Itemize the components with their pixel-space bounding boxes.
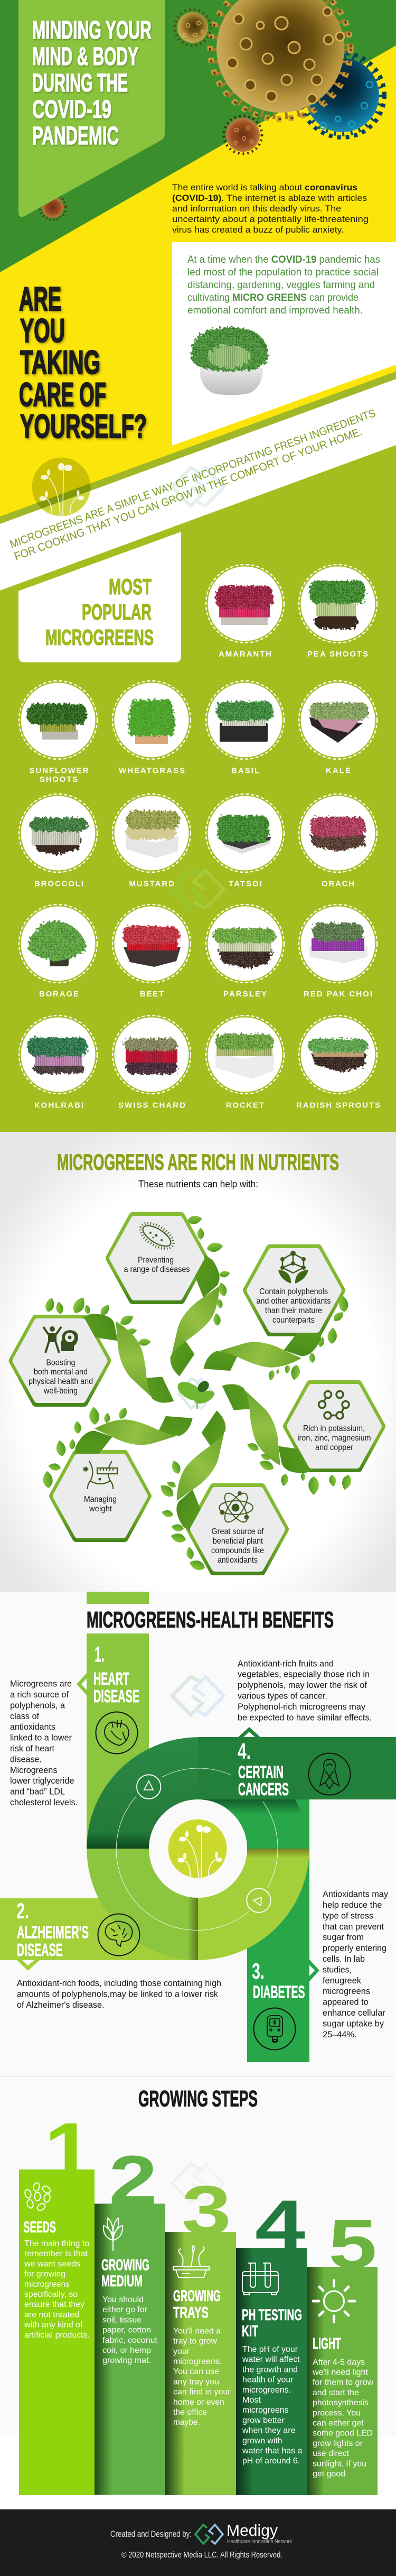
panel: benefits and steps background xyxy=(0,1592,396,2436)
benefit 2: alzheimer's disease xyxy=(16,1898,139,1960)
step 4: ph testing kit: when they are xyxy=(242,2426,296,2435)
card: orach: ORACH xyxy=(322,880,354,888)
heading: most popular microgreens xyxy=(45,574,154,650)
card: sunflower shoots: SUNFLOWER xyxy=(30,767,89,775)
big numerals: 2 xyxy=(109,2141,157,2219)
step 1: seeds: ensure that they xyxy=(24,2300,84,2309)
heading: are you taking care of yourself: ARE xyxy=(19,281,61,318)
step 3: growing trays xyxy=(165,2232,236,2495)
illustration: microgreens in bowl xyxy=(191,327,268,395)
card: rocket xyxy=(206,1015,284,1110)
step 5: light: for them to grow xyxy=(313,2378,373,2387)
text block: benefit 1 copy: risk of heart xyxy=(10,1744,54,1753)
icon: blue coronavirus xyxy=(300,53,384,137)
icon: brain xyxy=(98,1914,139,1956)
benefit 1: heart disease: 1. xyxy=(95,1642,105,1666)
step 2: growing medium xyxy=(95,2204,165,2495)
text block: callout copy: distancing, gardening, veggies farming and xyxy=(187,280,375,291)
card: parsley xyxy=(206,904,284,999)
icon: atom xyxy=(219,1490,253,1526)
step 2: growing medium: growing mat. xyxy=(102,2356,151,2365)
heading: growing steps: GROWING STEPS xyxy=(138,2086,258,2111)
card: minerals: iron, zinc, magnesium xyxy=(298,1434,371,1443)
card: mental and physical health: well-being xyxy=(43,1387,78,1396)
text block: benefit 3 copy: help reduce the xyxy=(323,1900,382,1910)
icon: Medigy logo xyxy=(195,2525,223,2544)
card: tatsoi xyxy=(206,794,284,888)
step 5: light: some good LED xyxy=(313,2429,373,2438)
card: mental and physical health: Boosting xyxy=(46,1359,75,1367)
step 3: growing trays: any tray you xyxy=(173,2377,219,2386)
benefit 1: heart disease xyxy=(93,1642,139,1754)
step 4: ph testing kit: microgreens xyxy=(242,2406,289,2415)
text block: benefit 3 copy: sugar from xyxy=(323,1933,364,1942)
benefit 2: alzheimer's disease: DISEASE xyxy=(17,1940,63,1960)
panel: popular microgreens background xyxy=(0,445,396,1132)
arrow: benefit 3 xyxy=(309,1960,319,1981)
step 5: light: process. You xyxy=(313,2408,361,2417)
icon: seeds xyxy=(24,2182,52,2212)
heading: are you taking care of yourself xyxy=(19,281,147,445)
footer xyxy=(0,2509,396,2576)
heading: are you taking care of yourself: YOURSELF? xyxy=(20,408,147,445)
card: polyphenols: counterparts xyxy=(272,1316,315,1325)
step 1: seeds: we want seeds xyxy=(24,2259,80,2268)
icon: red coronavirus xyxy=(224,116,262,154)
card: parsley: PARSLEY xyxy=(223,990,267,999)
card: wheatgrass xyxy=(112,681,191,775)
diagram: twisted ribbons xyxy=(64,1255,332,1532)
step 3: growing trays: TRAYS xyxy=(173,2304,209,2322)
footer: Created and Designed by: xyxy=(110,2529,192,2539)
text block: benefit 1 copy: polyphenols, a xyxy=(10,1701,65,1710)
text block: benefit 4 copy: Antioxidant-rich fruits and xyxy=(238,1659,334,1668)
card: kale xyxy=(299,681,377,775)
watermark logo xyxy=(246,194,285,223)
heading: most popular microgreens: MICROGREENS xyxy=(45,625,154,650)
panel: white callout xyxy=(172,242,396,446)
text block: benefit 3 copy: properly entering xyxy=(323,1944,386,1953)
icon: awareness ribbon xyxy=(308,1753,351,1795)
icon: large gold coronavirus xyxy=(210,0,351,119)
card: radish sprouts: RADISH SPROUTS xyxy=(296,1101,380,1110)
text block: intro: (COVID-19). The internet is ablaze with articles xyxy=(172,193,367,203)
card: plant compounds xyxy=(194,1490,281,1568)
step 3: growing trays: tray to grow xyxy=(173,2337,217,2346)
benefit 3: diabetes xyxy=(252,1959,305,2050)
text block: intro: The entire world is talking about coronavirus xyxy=(172,182,357,192)
card: plant compounds: beneficial plant xyxy=(213,1537,263,1546)
card: red pak choi xyxy=(299,904,377,999)
text block: benefit 3 copy: microgreens xyxy=(323,1987,370,1996)
text block: benefit 3 copy: appeared to xyxy=(323,1998,369,2007)
step 2: growing medium: soil, tissue xyxy=(102,2315,142,2324)
card: broccoli: BROCCOLI xyxy=(34,880,83,888)
title xyxy=(32,16,152,150)
benefit 3: diabetes: 3. xyxy=(252,1959,265,1983)
card: basil: BASIL xyxy=(231,767,259,775)
text block: benefit 1 copy xyxy=(10,1679,78,1807)
step 1: seeds: SEEDS xyxy=(23,2219,56,2236)
icon: small red virus under title panel xyxy=(40,195,65,220)
watermark logo xyxy=(172,1677,224,1715)
text block: callout copy: led most of the population to practice social xyxy=(187,267,379,278)
step 1: seeds: with any kind of xyxy=(24,2321,83,2330)
icon: centre sprout xyxy=(168,1820,227,1878)
card: preventing diseases: a range of diseases xyxy=(124,1265,190,1274)
panel: hero background xyxy=(0,0,396,534)
card: pea shoots xyxy=(299,565,377,659)
text block: benefit 4 copy: be expected to have similar effects. xyxy=(238,1713,372,1722)
card: red pak choi: RED PAK CHOI xyxy=(304,990,372,999)
text block: benefit 4 copy: vegetables, especially those rich in xyxy=(238,1670,370,1679)
step 4: ph testing kit: health of your xyxy=(242,2376,294,2385)
footer: Medigy xyxy=(227,2521,278,2540)
step 5: light: and start the xyxy=(313,2388,359,2397)
title: COVID-19 xyxy=(32,96,111,124)
step 2: growing medium: either go for xyxy=(102,2305,148,2314)
card: tatsoi: TATSOI xyxy=(229,880,262,888)
card: mustard xyxy=(112,794,191,888)
title: PANDEMIC xyxy=(32,122,119,150)
card: polyphenols: and other antioxidants xyxy=(257,1297,331,1306)
step 3: growing trays: can find in your xyxy=(173,2388,231,2397)
icon: glucose meter xyxy=(253,2008,296,2050)
icon: tray with sprouts xyxy=(173,2246,209,2277)
text block: benefit 2 copy: of Alzheimer's disease. xyxy=(17,2000,105,2010)
text block: benefit 4 copy: various types of cancer. xyxy=(238,1692,327,1701)
step 4: ph testing kit: water that has a xyxy=(242,2446,303,2455)
step 2: growing medium: You should xyxy=(102,2295,144,2304)
text block: benefit 2 copy: Antioxidant-rich foods, including those containing high xyxy=(17,1979,221,1988)
text block: benefit 1 copy: disease. xyxy=(10,1755,42,1764)
card: mental and physical health xyxy=(16,1322,103,1399)
icon: bacterium xyxy=(136,1218,177,1254)
card: swiss chard xyxy=(112,1015,191,1110)
icon: person and head xyxy=(43,1326,78,1353)
step 5: light: use direct xyxy=(313,2449,350,2458)
text block: benefit 1 copy: a rich source of xyxy=(10,1690,69,1700)
step 1: seeds: microgreens xyxy=(24,2280,70,2289)
step 2: growing medium: paper, cotton xyxy=(102,2326,151,2335)
card: polyphenols: than their mature xyxy=(265,1306,322,1315)
step 1: seeds: are not treated xyxy=(24,2310,79,2319)
card: managing weight xyxy=(56,1457,144,1535)
step 4: ph testing kit: grow better xyxy=(242,2416,285,2425)
icon: waist with tape xyxy=(83,1461,117,1489)
step 2: growing medium: GROWING xyxy=(101,2256,149,2274)
big numerals: 5 xyxy=(328,2205,377,2283)
icon: sprout badge xyxy=(32,458,91,516)
text block: benefit 3 copy: fenugreek xyxy=(323,1976,362,1986)
step 3: growing trays: your xyxy=(173,2347,190,2356)
arrow: benefit 2 xyxy=(17,1960,40,1971)
accent bar xyxy=(87,1592,149,1604)
step 5: light: After 4-5 days xyxy=(313,2358,365,2367)
text block: benefit 3 copy: Antioxidants may xyxy=(323,1890,389,1899)
step 5: light: get good xyxy=(313,2470,345,2478)
step 2: growing medium: fabric, coconut xyxy=(102,2336,158,2345)
text block: nutrients subheading: These nutrients can help with: xyxy=(138,1179,258,1189)
step 4: ph testing kit: KIT xyxy=(242,2323,258,2340)
panel: lower white background xyxy=(0,2436,396,2509)
icon: sun xyxy=(313,2280,355,2322)
big numerals: 4 xyxy=(255,2185,305,2263)
card: borage xyxy=(19,904,97,999)
step 3: growing trays: the office xyxy=(173,2408,207,2417)
card: sunflower shoots: SHOOTS xyxy=(40,775,78,784)
step 1: seeds: The main thing to xyxy=(24,2239,89,2248)
benefit 2 band xyxy=(0,1898,198,1960)
card: plant compounds: antioxidants xyxy=(218,1556,258,1565)
card: orach xyxy=(299,794,377,888)
title: MINDING YOUR xyxy=(32,16,152,44)
watermark logo xyxy=(172,468,224,506)
benefit 4 band xyxy=(198,1737,396,1799)
step 4: ph testing kit: pH of around 6. xyxy=(242,2457,300,2466)
card: kale: KALE xyxy=(326,767,351,775)
card: beet: BEET xyxy=(140,990,164,999)
step 4: ph testing kit: the growth and xyxy=(242,2365,298,2374)
step 1: seeds: specifically, so xyxy=(24,2290,78,2299)
watermark logo xyxy=(172,870,224,908)
benefit 3 bar xyxy=(247,1799,309,2062)
step 4: ph testing kit: PH TESTING xyxy=(242,2306,302,2324)
card: mustard: MUSTARD xyxy=(129,880,174,888)
big numerals: 3 xyxy=(182,2171,231,2249)
step 5: light: LIGHT xyxy=(313,2335,341,2352)
decorative yellow strip and olive strip xyxy=(0,372,396,524)
text block: benefit 1 copy: cholesterol levels. xyxy=(10,1798,78,1807)
card: minerals xyxy=(290,1388,378,1465)
step 3: growing trays: maybe. xyxy=(173,2418,200,2427)
card: radish sprouts xyxy=(296,1015,380,1110)
icon: ring node bottom xyxy=(247,1888,271,1913)
card: kohlrabi: KOHLRABI xyxy=(34,1101,83,1110)
step 2: growing medium: MEDIUM xyxy=(101,2273,143,2290)
step 1: seeds xyxy=(19,2169,95,2495)
step 4: ph testing kit xyxy=(236,2248,307,2495)
decoration: leaves around diagram xyxy=(42,1214,353,1572)
step 3: growing trays: microgreens. xyxy=(173,2357,222,2366)
panel: nutrients background xyxy=(0,1132,396,1592)
step 5: light: can either get xyxy=(313,2419,364,2427)
benefit 1: heart disease: HEART xyxy=(93,1669,129,1688)
card: minerals: and copper xyxy=(315,1443,354,1452)
text block: benefit 3 copy: type of stress xyxy=(323,1911,373,1921)
text block: intro: virus has created a buzz of public anxiety. xyxy=(172,225,344,235)
icon: test tubes xyxy=(242,2263,278,2295)
card: mental and physical health: both mental and xyxy=(34,1368,88,1377)
chart: ring quadrants xyxy=(87,1737,309,1960)
card: amaranth xyxy=(206,565,284,659)
text block: benefit 2 copy xyxy=(17,1979,221,2010)
card: amaranth: AMARANTH xyxy=(219,650,271,659)
text block: benefit 3 copy: 25–44%. xyxy=(323,2030,357,2039)
benefit 1 bar xyxy=(87,1633,149,1849)
icon: mineral rings xyxy=(319,1391,349,1419)
text block: benefit 1 copy: lower triglyceride xyxy=(10,1776,74,1786)
step 4: ph testing kit: water will affect xyxy=(242,2355,300,2364)
text block: benefit 3 copy: that can prevent xyxy=(323,1922,384,1932)
text block: intro: uncertainty about a potentially life-threatening xyxy=(172,214,369,224)
step 5: light: we'll need light xyxy=(312,2368,369,2377)
card: pea shoots: PEA SHOOTS xyxy=(307,650,368,659)
text block: benefit 3 copy: sugar uptake by xyxy=(323,2019,384,2028)
arrow: benefit 4 xyxy=(238,1727,260,1737)
card: beet xyxy=(112,904,191,999)
step 3: growing trays: You can use xyxy=(173,2367,219,2376)
step 5: light: grow lights or xyxy=(313,2439,363,2448)
card: plant compounds: Great source of xyxy=(211,1527,264,1536)
card: borage: BORAGE xyxy=(39,990,79,999)
text block: benefit 1 copy: antioxidants xyxy=(10,1722,55,1732)
step 4: ph testing kit: microgreens. xyxy=(242,2386,291,2395)
text block: benefit 4 copy: Polyphenol-rich microgreens may xyxy=(238,1702,366,1712)
panel: popular microgreens heading card xyxy=(18,532,181,662)
step 4: ph testing kit: Most xyxy=(242,2396,261,2405)
icon: heart xyxy=(96,1712,137,1754)
title: DURING THE xyxy=(32,69,128,97)
footer: Healthcare Innovation Network xyxy=(227,2538,292,2545)
text block: benefit 3 copy xyxy=(323,1890,389,2039)
text block: benefit 1 copy: linked to a lower xyxy=(10,1733,72,1743)
step 3: growing trays: home or even xyxy=(173,2398,224,2407)
text block: benefit 3 copy: enhance cellular xyxy=(323,2008,385,2018)
card: managing weight: weight xyxy=(89,1504,112,1513)
step 3: growing trays: You'll need a xyxy=(173,2326,221,2335)
step 4: ph testing kit: grown with xyxy=(242,2436,282,2445)
step 2: growing medium: coir, or hemp xyxy=(102,2346,151,2355)
card: sunflower shoots xyxy=(19,681,97,784)
benefit 4: certain cancers: 4. xyxy=(238,1739,251,1764)
benefit 2: alzheimer's disease: 2. xyxy=(16,1898,29,1923)
step 5: light: sunlight. If you xyxy=(313,2459,366,2468)
heading: most popular microgreens: POPULAR xyxy=(82,599,152,624)
text block: benefit 4 copy: polyphenols, may lower the risk of xyxy=(238,1681,367,1690)
heading: are you taking care of yourself: YOU xyxy=(20,312,65,349)
panel: diagonal white band xyxy=(0,379,396,590)
step 5: light: photosynthesis xyxy=(313,2398,369,2407)
arrow: benefit 1 xyxy=(77,1673,87,1695)
card: swiss chard: SWISS CHARD xyxy=(118,1101,185,1110)
card: mental and physical health: physical health and xyxy=(29,1377,93,1386)
step 3: growing trays: GROWING xyxy=(173,2287,221,2305)
icon: central leaf logo xyxy=(173,1371,222,1416)
text block: callout copy: At a time when the COVID-19 pandemic has xyxy=(187,254,380,265)
text block: callout copy: cultivating MICRO GREENS can provide xyxy=(187,292,359,303)
benefit 3: diabetes: DIABETES xyxy=(253,1982,305,2002)
heading: are you taking care of yourself: TAKING xyxy=(20,344,100,381)
benefit 4: certain cancers: CERTAIN xyxy=(238,1762,284,1781)
text block: benefit 1 copy: class of xyxy=(10,1712,39,1721)
big numerals xyxy=(44,2106,377,2283)
text block: benefit 1 copy: Microgreens xyxy=(10,1766,57,1775)
card: wheatgrass: WHEATGRASS xyxy=(119,767,185,775)
text block: benefit 2 copy: amounts of polyphenols,may be linked to a lower risk xyxy=(17,1990,219,1999)
text block: benefit 1 copy: and “bad” LDL xyxy=(10,1787,65,1797)
icon: ring node top xyxy=(137,1775,161,1799)
heading: most popular microgreens: MOST xyxy=(109,574,152,599)
text block: intro: and information on this deadly virus. The xyxy=(172,204,341,214)
benefit 1: heart disease: DISEASE xyxy=(93,1686,139,1706)
card: plant compounds: compounds like xyxy=(211,1546,264,1555)
card: polyphenols xyxy=(250,1251,338,1329)
card: broccoli xyxy=(19,794,97,888)
card: rocket: ROCKET xyxy=(226,1101,264,1110)
footer: © 2020 Netspective Media LLC. All Rights Reserved. xyxy=(121,2551,282,2560)
step 5: light xyxy=(307,2267,378,2495)
title: MIND & BODY xyxy=(32,43,138,71)
icon: wheat xyxy=(103,2218,122,2251)
divider xyxy=(0,2076,396,2077)
step 1: seeds: artificial products. xyxy=(24,2331,90,2340)
heading: are you taking care of yourself: CARE OF xyxy=(19,376,106,413)
diagram: hexagon rims xyxy=(13,1216,382,1572)
card: kohlrabi xyxy=(19,1015,97,1110)
card: basil xyxy=(206,681,284,775)
step 1: seeds: remember is that xyxy=(24,2249,88,2258)
card: preventing diseases: Preventing xyxy=(138,1256,174,1265)
card: polyphenols: Contain polyphenols xyxy=(259,1287,328,1296)
step 1: seeds: for growing xyxy=(24,2270,65,2279)
step 4: ph testing kit: The pH of your xyxy=(242,2345,298,2354)
benefit 4: certain cancers xyxy=(238,1739,351,1799)
panel: title card xyxy=(18,0,165,217)
card: minerals: Rich in potassium, xyxy=(303,1424,365,1433)
text block: callout copy xyxy=(187,254,380,316)
icon: small gold coronavirus xyxy=(175,10,211,45)
text block: callout copy: emotional comfort and improved health. xyxy=(187,305,363,316)
text block: benefit 4 copy xyxy=(238,1659,372,1722)
text block: benefit 3 copy: studies, xyxy=(323,1965,352,1974)
benefit 4: certain cancers: CANCERS xyxy=(238,1779,289,1799)
card: managing weight: Managing xyxy=(84,1495,117,1504)
icon: molecule with leaves xyxy=(278,1251,308,1284)
text block: benefit 1 copy: Microgreens are xyxy=(10,1679,72,1689)
benefit 2: alzheimer's disease: ALZHEIMER'S xyxy=(17,1922,89,1942)
card: preventing diseases xyxy=(113,1218,201,1297)
text block: band statement: FOR COOKING THAT YOU CAN GROW IN THE COMFORT OF YOUR HOME. xyxy=(13,426,364,563)
text block: benefit 3 copy: cells. In lab xyxy=(323,1954,365,1964)
text block: intro xyxy=(172,182,369,235)
watermark logo xyxy=(172,2164,224,2202)
big numerals: 1 xyxy=(44,2106,93,2195)
